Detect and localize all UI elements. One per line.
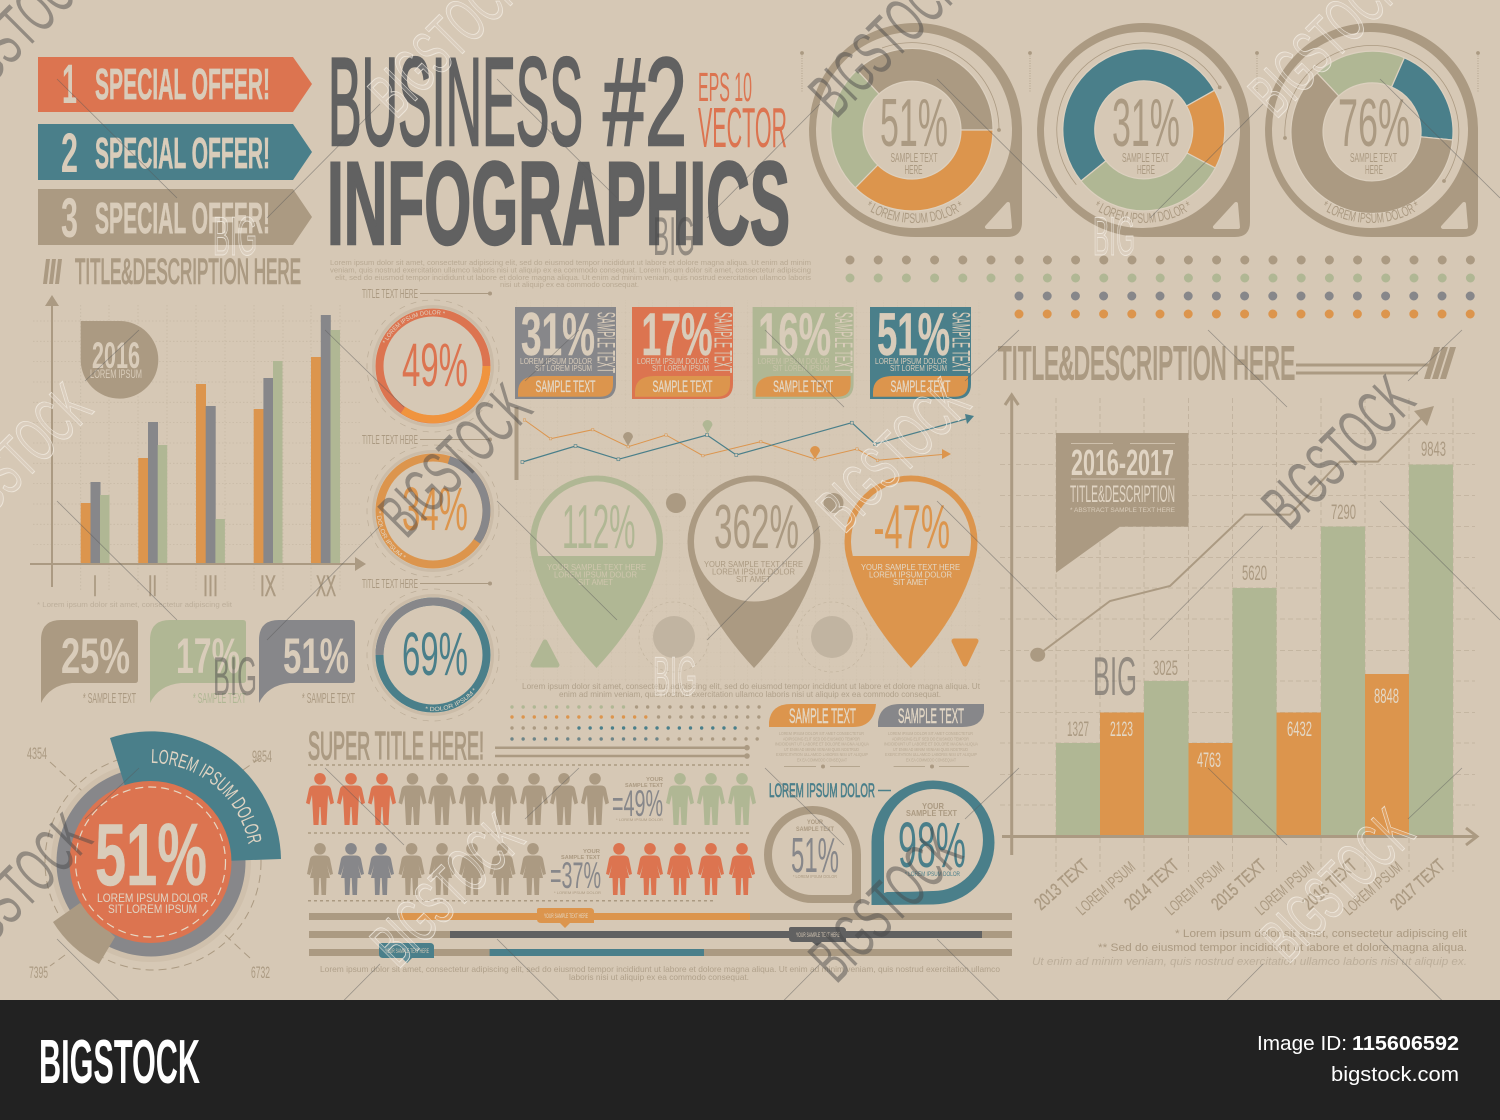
banner 2: SPECIAL OFFER! (95, 129, 270, 178)
stat: 49% (612, 777, 664, 824)
trend line (1030, 406, 1434, 662)
text: VECTOR (698, 96, 787, 160)
drop badge: 98%: * LOREM IPSUM DOLOR (905, 872, 961, 878)
red people (306, 773, 396, 825)
center paragraph: Lorem ipsum dolor sit amet, consectetur adipiscing elit, sed do eiusmod tempor incididunt ut labore et dolore magna aliqua. Ut (522, 681, 981, 691)
gauge 3: 76% (1255, 23, 1480, 237)
bar chart: left: XX (316, 570, 336, 603)
pin: -47%: LOREM IPSUM DOLOR (869, 570, 952, 580)
numbers: 4354 (27, 744, 47, 763)
value caption: LOREM IPSUM DOLOR (97, 891, 208, 905)
bar values: 9843 (1421, 438, 1446, 461)
bar 1: YOUR SAMPLE TEXT HERE (544, 914, 588, 920)
grey tab text: UT ENIM AD MINIM VENIAM QUIS NOSTRUD (893, 747, 969, 752)
callout: 2016-2017: * ABSTRACT SAMPLE TEXT HERE (1070, 507, 1176, 514)
footnotes (1032, 928, 1467, 968)
roman labels: III (203, 570, 218, 603)
text: SUPER TITLE HERE! (308, 725, 484, 768)
pin: 112%: YOUR SAMPLE TEXT HERE (547, 563, 646, 572)
gauge caption: SAMPLE TEXT (890, 150, 938, 165)
x labels: 2017 TEXT (1386, 855, 1449, 914)
ring 69%: 69% (402, 620, 468, 688)
center disc (70, 781, 232, 943)
banner 3: SPECIAL OFFER! (95, 194, 270, 243)
arc line (800, 43, 1000, 132)
pin: 362%: SIT AMET (736, 575, 771, 584)
stat card: 16% (753, 301, 857, 399)
callout: 2016 (81, 321, 158, 399)
bar values: 8848 (1374, 685, 1399, 708)
site url: bigstock.com (1331, 1064, 1459, 1086)
stat card: 16%: 16% (758, 301, 831, 368)
bar 1 (309, 908, 1012, 928)
grey tab text: INCIDIDUNT UT LABORE ET DOLORE MAGNA ALIQUA (884, 742, 978, 747)
callout: 2016-2017: 2016-2017 (1071, 442, 1174, 483)
arc line (1256, 45, 1480, 183)
pin: -47%: SIT AMET (893, 578, 928, 587)
x labels: LOREM IPSUM (1252, 859, 1318, 919)
orange tab: SAMPLE TEXT (789, 705, 856, 728)
curved label: * LOREM IPSUM DOLOR * (868, 201, 962, 224)
drop badge: 98% (872, 780, 994, 905)
stat: 37%: =37% (550, 855, 601, 896)
leader lines (45, 754, 262, 970)
stat card: 16%: LOREM IPSUM DOLOR (758, 357, 830, 366)
bar 3 (309, 943, 1012, 963)
callout: 2016: 2016 (92, 335, 140, 376)
drop badge: 51%: 51% (791, 829, 839, 883)
footnotes: Ut enim ad minim veniam, quis nostrud exercitation ullamco laboris nisi ut aliquip ex. (1032, 956, 1467, 968)
orange tab rule (784, 764, 860, 768)
tan people (398, 773, 609, 825)
center grid (515, 300, 982, 682)
rules and slashes (1296, 347, 1456, 379)
gauge case (1037, 23, 1250, 237)
radial chart: 51% (27, 731, 281, 982)
drop badge: 51%: * LOREM IPSUM DOLOR (793, 874, 838, 879)
axis bar (514, 407, 518, 480)
stat card: 16%: SAMPLE TEXT (829, 312, 857, 373)
orange tab text: INCIDIDUNT UT LABORE ET DOLORE MAGNA ALIQUA (775, 742, 869, 747)
sector label: LOREM IPSUM DOLOR (152, 749, 262, 844)
gauge 1: 51% (800, 23, 1022, 237)
bars (81, 315, 340, 563)
orange tab text (775, 731, 869, 762)
bar 2: YOUR SAMPLE TEXT HERE (796, 933, 840, 939)
value: 51% (95, 805, 207, 904)
text: * SAMPLE TEXT (193, 690, 246, 707)
banner 1 (38, 52, 312, 115)
grey tab: SAMPLE TEXT (898, 705, 964, 728)
speech bubble: 25%: 25% (61, 628, 130, 684)
chart grid (1000, 398, 1475, 872)
drop badge: 51%: YOUR (807, 819, 823, 826)
orange line (524, 420, 942, 460)
ring 49%: 49% (402, 331, 468, 399)
speech bubble: 17% (150, 620, 246, 707)
gauge case (809, 23, 1022, 237)
green people (666, 773, 756, 825)
ring 69%: * DOLOR IPSUM * (426, 688, 475, 711)
x labels: 2014 TEXT (1120, 855, 1183, 914)
ring label 2: TITLE TEXT HERE (362, 432, 418, 447)
ring 69% (366, 588, 500, 722)
gauge 2: 31%: 31% (1112, 85, 1180, 161)
bar 3: YOUR SAMPLE TEXT HERE (385, 949, 429, 955)
orange tab text: LOREM IPSUM DOLOR SIT AMET CONSECTETUR (779, 731, 865, 736)
stat: 49%: SAMPLE TEXT (625, 783, 664, 789)
footnotes: * Lorem ipsum dolor sit amet, consectetur adipiscing elit (1175, 928, 1467, 940)
center paragraph (522, 681, 981, 699)
gauge 2: 31% (1028, 23, 1250, 237)
drop badge: 98%: SAMPLE TEXT (906, 808, 958, 818)
stat: 37%: YOUR (583, 849, 600, 855)
intro paragraph: nisi ut aliquip ex ea commodo consequat. (500, 280, 639, 289)
ring 49%: * LOREM IPSUM DOLOR * (382, 310, 445, 343)
curved label: * LOREM IPSUM DOLOR * (1096, 201, 1190, 224)
stat card: 17%: LOREM IPSUM DOLOR (637, 357, 709, 366)
bar chart: left (30, 295, 366, 609)
pin: -47%: -47% (874, 493, 950, 562)
x labels: LOREM IPSUM (1162, 859, 1228, 919)
stat card: 51%: SIT LOREM IPSUM (890, 364, 947, 373)
banner 3 (38, 186, 312, 249)
bar values (1067, 438, 1446, 772)
slashes (43, 259, 62, 284)
heading: lorem ipsum dolor: LOREM IPSUM DOLOR (769, 781, 875, 802)
x labels: 2016 TEXT (1298, 855, 1361, 914)
drop badge: 51% (764, 806, 861, 903)
stat card: 31%: 31% (521, 301, 595, 368)
gauge caption: SAMPLE TEXT (1122, 150, 1169, 165)
bottom paragraph: laboris nisi ut aliquip ex ea commodo consequat. (569, 972, 749, 982)
footnote: * Lorem ipsum dolor sit amet, consectetur adipiscing elit (37, 600, 233, 609)
gauge case (1265, 23, 1478, 237)
arrowheads (942, 414, 974, 459)
title line: infographics: INFOGRAPHICS (327, 138, 790, 270)
speech bubble: 17%: 17% (176, 628, 240, 684)
pictogram row 2 (307, 843, 755, 896)
dashed separators (308, 765, 750, 901)
donut chart (1291, 51, 1453, 214)
stat card: 31%: SIT LOREM IPSUM (535, 364, 592, 373)
donut chart (1063, 49, 1225, 211)
drop badge: 98%: YOUR (922, 801, 944, 811)
bars (1056, 465, 1453, 835)
stat: 49%: =49% (612, 783, 663, 824)
gauge caption (890, 150, 938, 177)
intro paragraph: veniam, quis nostrud exercitation ullamco laboris nisi ut aliquip ex ea commodo consequat. Lorem ipsum dolor sit amet, consectetur adipiscing (330, 266, 811, 274)
line chart (514, 407, 974, 480)
pin: 112%: 112% (562, 493, 636, 562)
speech bubble: 51% (259, 620, 355, 707)
orange tab text: EX EA COMMODO CONSEQUAT (797, 758, 847, 762)
grey tab rule (894, 764, 969, 768)
bar values: 2123 (1110, 718, 1133, 741)
small dot rows (512, 707, 760, 739)
x labels (1030, 855, 1449, 919)
stat card: 17%: SAMPLE TEXT (652, 377, 712, 396)
stat card: 31%: SAMPLE TEXT (592, 312, 620, 373)
stat: 49%: YOUR (646, 777, 663, 783)
teal sector (110, 731, 281, 862)
ring label 3: TITLE TEXT HERE (362, 576, 418, 591)
speech bubble: 25% (41, 620, 138, 707)
pin: 112%: LOREM IPSUM DOLOR (554, 570, 637, 580)
ring label 1: TITLE TEXT HERE (362, 286, 418, 301)
bar values: 3025 (1153, 657, 1178, 680)
title rules (495, 745, 750, 759)
heading: lorem ipsum dolor (769, 781, 891, 802)
ring column (362, 286, 500, 722)
image number: 115606592 (1352, 1033, 1459, 1055)
dot matrix (850, 260, 1472, 314)
watermarks: light: BIG (653, 645, 697, 707)
pin: 362%: LOREM IPSUM DOLOR (712, 568, 795, 576)
grey tab text: EX EA COMMODO CONSEQUAT (906, 758, 956, 762)
stat: 37%: * LOREM IPSUM DOLOR (554, 890, 601, 895)
intro paragraph: Lorem ipsum dolor sit amet, consectetur adipiscing elit, sed do eiusmod tempor incididunt ut labore et dolore magna aliqua. Ut enim ad minim (330, 258, 811, 267)
numbers (27, 744, 272, 982)
watermarks: dark: BIGSTOCK (795, 815, 975, 995)
sample tabs (769, 704, 984, 768)
text: TITLE&DESCRIPTION HERE (75, 252, 301, 292)
halo (51, 762, 251, 962)
grey tab text (884, 731, 978, 762)
pictogram row 1 (306, 773, 756, 825)
banner 3: 3 (61, 186, 78, 249)
stat card: 31%: SAMPLE TEXT (536, 377, 596, 396)
value caption: SIT LOREM IPSUM (108, 902, 197, 916)
watermarks: dark: BIG (1093, 645, 1137, 707)
numbers: 6732 (251, 963, 270, 982)
numbers: 9854 (252, 747, 272, 766)
banner 1: 1 (62, 52, 77, 115)
banner 2 (38, 121, 312, 184)
roman labels: IX (260, 570, 276, 603)
stat card: 17% (632, 301, 736, 399)
watermarks: light: BIG (213, 205, 257, 267)
ring 49% (366, 300, 500, 432)
gauge caption: HERE (1137, 162, 1155, 177)
right heading (998, 337, 1456, 389)
gauge caption: HERE (1365, 162, 1383, 177)
x labels: 2013 TEXT (1030, 855, 1093, 914)
ring 34% (366, 444, 500, 578)
roman labels (93, 570, 336, 603)
watermarks: dark: BIG (213, 645, 257, 707)
footnotes: ** Sed do eiusmod tempor incididunt ut labore et dolore magna aliqua. (1098, 942, 1467, 954)
main title: BUSINESS (328, 33, 583, 172)
x labels: LOREM IPSUM (1073, 859, 1139, 919)
bar chart: right: TITLE&DESCRIPTION (1070, 481, 1175, 508)
pin: 112%: SIT AMET (578, 578, 613, 587)
ring 34%: * DOLOR IPSUM * (377, 511, 406, 558)
gauge 1: 51%: 51% (880, 85, 948, 161)
bar chart: right (1000, 395, 1477, 968)
bottom paragraph: Lorem ipsum dolor sit amet, consectetur adipiscing elit, sed do eiusmod tempor incididunt ut labore et dolore magna aliqua. Ut enim ad minim veniam, quis nostrud exercitation ullamco (320, 964, 1000, 974)
title: #2: #2 (603, 33, 687, 172)
progress bars (309, 908, 1012, 963)
pin: 362%: 362% (714, 493, 799, 562)
numbers: 7395 (29, 963, 48, 982)
roman labels: II (148, 570, 157, 603)
chart grid (33, 305, 360, 590)
footer bar: BIGSTOCK (39, 1028, 200, 1097)
watermarks: dark: BIGSTOCK (365, 370, 545, 550)
speech bubble: 51%: 51% (283, 628, 349, 684)
intro paragraph (330, 258, 811, 289)
bar 2 (309, 927, 1012, 946)
red people (606, 843, 755, 895)
grey ring (56, 768, 246, 956)
value caption (97, 891, 208, 916)
watermarks: dark: BIG (653, 205, 695, 267)
orange tab text: UT ENIM AD MINIM VENIAM QUIS NOSTRUD (784, 747, 860, 752)
text: * SAMPLE TEXT (302, 690, 355, 707)
pin accents (533, 493, 976, 672)
roman labels: I (93, 570, 97, 603)
banner 1: SPECIAL OFFER! (95, 60, 270, 109)
watermarks: light: BIGSTOCK (357, 800, 537, 980)
markers (623, 420, 820, 459)
pin: 112% (530, 475, 663, 668)
teal line (522, 419, 966, 462)
text: * SAMPLE TEXT (83, 690, 136, 707)
grey tab text: EXERCITATION ULLAMCO LABORIS NISI UT ALIQUIP (885, 752, 977, 757)
orange tab text: EXERCITATION ULLAMCO LABORIS NISI UT ALIQUIP (776, 752, 868, 757)
left heading (43, 252, 301, 292)
bar values: 7290 (1331, 501, 1356, 524)
stat card: 51% (870, 301, 974, 399)
grey tab text: ADIPISCING ELIT SED DO EIUSMOD TEMPOR (892, 736, 970, 741)
dashed inner ring (76, 787, 226, 937)
stat card: 17%: 17% (642, 301, 712, 368)
stat card: 17%: SAMPLE TEXT (708, 312, 736, 373)
stat card: 51%: SAMPLE TEXT (890, 377, 950, 396)
axes (30, 295, 366, 587)
banner 2: 2 (61, 121, 78, 184)
grey tab (878, 704, 984, 728)
bar values: 4763 (1197, 749, 1221, 772)
gauge caption: SAMPLE TEXT (1350, 150, 1397, 165)
image id: Image ID: (1257, 1033, 1347, 1055)
bar values: 6432 (1287, 718, 1312, 741)
grey tab text: LOREM IPSUM DOLOR SIT AMET CONSECTETUR (888, 731, 974, 736)
intro paragraph: elit, sed do eiusmod tempor incididunt ut labore et dolore magna aliqua. Ut enim ad minim veniam, quis nostrud exercitation ullamco laboris (335, 273, 811, 282)
stat card: 51%: 51% (877, 301, 950, 368)
orange tab text: ADIPISCING ELIT SED DO EIUSMOD TEMPOR (783, 736, 861, 741)
callout: 2016: LOREM IPSUM (90, 367, 142, 381)
gauge caption: HERE (904, 162, 923, 177)
stat: 37% (550, 849, 601, 896)
axes (1002, 395, 1477, 855)
bar values: 5620 (1242, 562, 1267, 585)
stat: 37%: SAMPLE TEXT (561, 855, 601, 861)
ring 34%: 34% (402, 475, 468, 543)
tan and grey people (307, 843, 546, 895)
drop badge: 51%: SAMPLE TEXT (796, 826, 834, 833)
x labels: LOREM IPSUM (1340, 859, 1406, 919)
banner list: special offers (38, 52, 312, 249)
watermarks: light: BIG (1093, 205, 1135, 267)
stat card: 51%: SAMPLE TEXT (946, 312, 974, 373)
pin: 362%: YOUR SAMPLE TEXT HERE (704, 560, 803, 569)
x labels: 2015 TEXT (1207, 855, 1270, 914)
drop badge: 98%: 98% (898, 809, 966, 881)
footer bar (0, 1000, 1500, 1120)
bar values: 1327 (1067, 718, 1089, 741)
gauge caption (1122, 150, 1169, 177)
curved label: * LOREM IPSUM DOLOR * (1324, 201, 1418, 224)
callout: 2016-2017 (1056, 433, 1188, 573)
stat card: 17%: SIT LOREM IPSUM (652, 364, 709, 373)
stat card: 16%: SAMPLE TEXT (773, 377, 833, 396)
stat card: 31%: LOREM IPSUM DOLOR (520, 357, 592, 366)
stat card: 16%: SIT LOREM IPSUM (773, 364, 830, 373)
gauge caption (1350, 150, 1397, 177)
donut chart (831, 48, 993, 211)
arc line (1028, 43, 1221, 185)
pin: -47%: YOUR SAMPLE TEXT HERE (861, 563, 960, 572)
stat: 49%: * LOREM IPSUM DOLOR (616, 817, 663, 822)
tan sector (53, 903, 115, 964)
center paragraph: enim ad minim veniam, quis nostrud exercitation ullamco laboris nisi ut aliquip ex ea commodo consequat. (559, 689, 941, 699)
main title (327, 33, 790, 270)
watermarks: light: BIGSTOCK (803, 365, 983, 545)
stat card: 31% (515, 301, 620, 399)
stat card: 51%: LOREM IPSUM DOLOR (875, 357, 947, 366)
pin: -47% (845, 475, 977, 668)
orange tab (769, 704, 876, 728)
main title: EPS 10 (698, 64, 752, 110)
pin: 362% (688, 475, 820, 668)
bottom paragraph (320, 964, 1000, 982)
gauge value: 76% (1338, 85, 1410, 161)
